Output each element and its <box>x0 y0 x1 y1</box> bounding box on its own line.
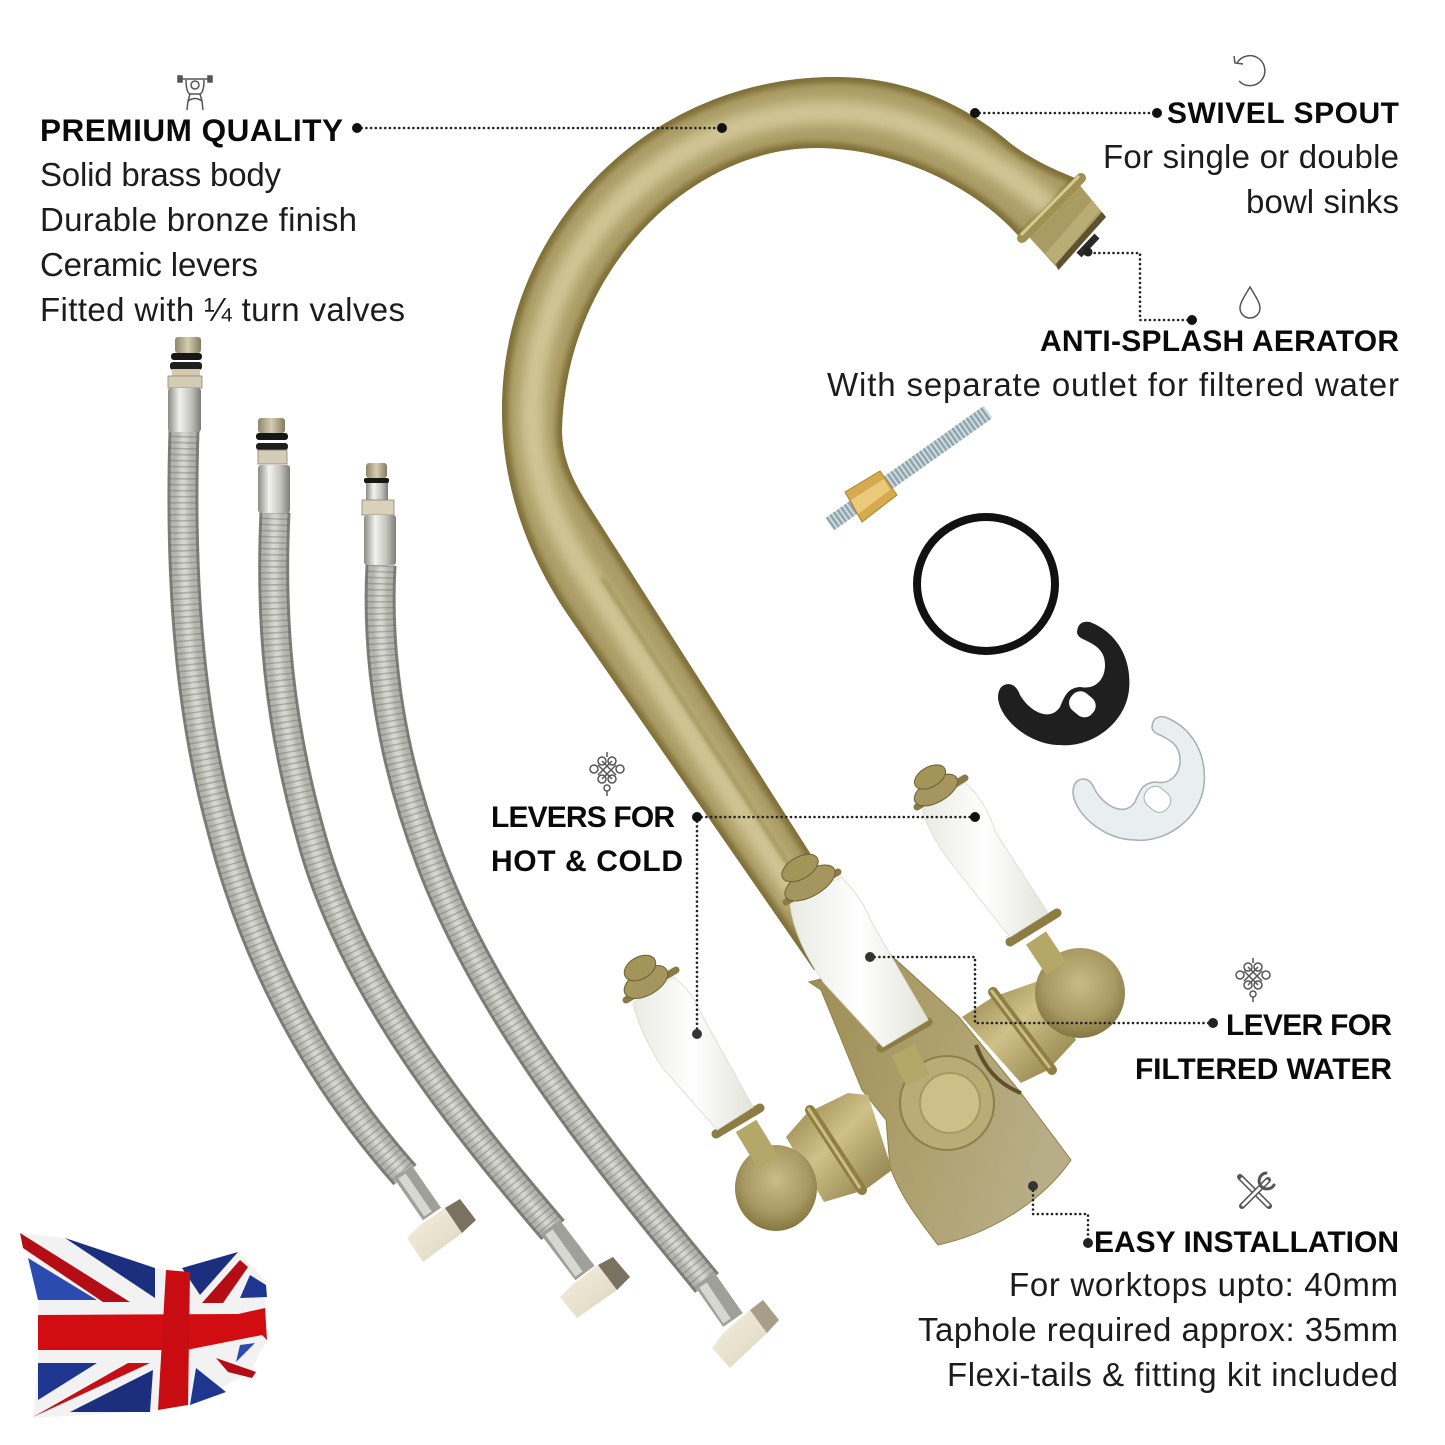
heading: easy installation: EASY INSTALLATION <box>1094 1226 1399 1259</box>
text: premium features: Ceramic levers <box>40 246 258 283</box>
icon: knot <box>1236 958 1270 1002</box>
text: swivel description <box>1103 138 1399 220</box>
UK flag <box>20 1233 267 1418</box>
callout: levers for hot and cold <box>491 752 980 1039</box>
lever: right ceramic <box>909 760 1048 937</box>
leader: premium quality <box>352 123 727 133</box>
hose 1 <box>168 337 476 1262</box>
spout end with aerator <box>1021 176 1106 270</box>
heading: levers <box>491 801 683 878</box>
heading: filtered water: FILTERED WATER <box>1135 1053 1392 1086</box>
icon: water drop <box>1240 287 1260 318</box>
heading: levers: LEVERS FOR <box>491 801 675 834</box>
leader: aerator <box>1090 253 1197 325</box>
leader: filtered water <box>865 952 1218 1028</box>
flexi hoses <box>168 337 779 1368</box>
tap: left hub <box>716 1093 892 1231</box>
heading: anti-splash aerator: ANTI-SPLASH AERATOR <box>1040 325 1399 358</box>
leader: swivel spout <box>970 108 1162 118</box>
hose 2 <box>256 418 630 1318</box>
callout: anti-splash aerator <box>827 253 1399 403</box>
spout tube <box>502 77 1074 970</box>
heading: premium quality: PREMIUM QUALITY <box>40 112 343 148</box>
lever: middle ceramic <box>777 848 928 1047</box>
icon: knot <box>590 752 624 796</box>
text: installation details: Taphole required approx: 35mm <box>918 1311 1398 1348</box>
tap: base body <box>809 948 1071 1245</box>
text: swivel description: For single or double <box>1103 138 1399 175</box>
text: premium features: Solid brass body <box>40 156 282 193</box>
tap: middle hub <box>881 1022 994 1150</box>
icon: rotate arrow <box>1234 56 1265 86</box>
callout: premium quality <box>40 76 727 328</box>
text: premium features: Durable bronze finish <box>40 201 357 238</box>
fitting kit: rubber O-ring <box>917 517 1055 651</box>
tap: right hub <box>962 913 1125 1083</box>
tap: spout <box>480 60 1106 990</box>
text: installation details <box>918 1266 1398 1393</box>
heading: filtered water <box>1135 1009 1392 1086</box>
leader: levers <box>692 812 980 1039</box>
text: aerator description: With separate outlet for filtered water <box>827 366 1399 403</box>
callout: easy installation <box>918 1173 1399 1393</box>
heading: swivel spout: SWIVEL SPOUT <box>1167 97 1399 130</box>
fitting kit: threaded bolt <box>830 412 988 524</box>
callout: lever for filtered water <box>865 952 1392 1086</box>
text: premium features: Fitted with ¼ turn valves <box>40 291 405 328</box>
heading: levers: HOT & COLD <box>491 845 683 878</box>
icon: weightlifter <box>178 76 212 110</box>
fitting kit: silver washer <box>1073 717 1204 840</box>
text: swivel description: bowl sinks <box>1246 183 1399 220</box>
hose 3 <box>362 463 779 1368</box>
lever: left ceramic <box>619 950 753 1130</box>
text: installation details: Flexi-tails & fitting kit included <box>947 1356 1398 1393</box>
icon: tools <box>1240 1173 1274 1206</box>
fitting kit: black washer <box>998 622 1129 745</box>
callout: swivel spout <box>970 56 1399 220</box>
leader: easy installation <box>1028 1181 1093 1248</box>
text: installation details: For worktops upto: 40mm <box>1009 1266 1398 1303</box>
heading: filtered water: LEVER FOR <box>1226 1009 1392 1042</box>
text: premium features <box>40 156 405 328</box>
